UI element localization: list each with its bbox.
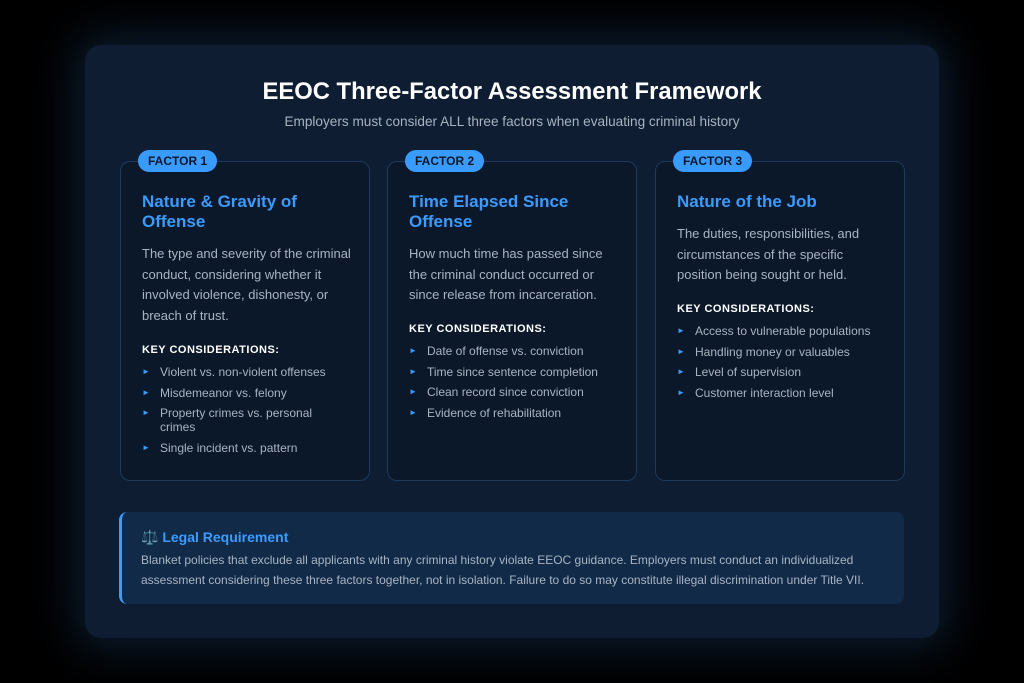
list: Time since sentence completion xyxy=(427,364,598,378)
list: Access to vulnerable populations xyxy=(695,324,870,338)
description: The type and severity of the criminal conduct, considering whether it involved violence, dishonesty, or breach of trust. xyxy=(142,246,351,322)
list: Customer interaction level xyxy=(695,386,834,400)
list: Misdemeanor vs. felony xyxy=(160,386,287,400)
badge: factor 3 xyxy=(673,150,752,172)
badge: factor 3: FACTOR 3 xyxy=(683,154,742,168)
description: The duties, responsibilities, and circumstances of the specific position being sought or held. xyxy=(677,226,859,282)
list: Violent vs. non-violent offenses xyxy=(160,365,326,379)
list: Level of supervision xyxy=(695,365,801,379)
callout: legal requirement xyxy=(119,512,904,604)
list: Handling money or valuables xyxy=(695,344,850,358)
list xyxy=(678,324,870,400)
list: Evidence of rehabilitation xyxy=(427,406,561,420)
legal heading with scale icon: ⚖️ Legal Requirement xyxy=(141,529,288,545)
heading: Nature of the Job xyxy=(677,192,817,211)
list xyxy=(410,344,598,420)
badge: factor 2: FACTOR 2 xyxy=(415,154,474,168)
badge: factor 2 xyxy=(405,150,484,172)
list: Single incident vs. pattern xyxy=(160,440,297,454)
key considerations label: KEY CONSIDERATIONS: xyxy=(409,323,546,335)
heading: Time Elapsed Since Offense xyxy=(409,192,568,231)
list xyxy=(144,365,326,454)
list: Clean record since conviction xyxy=(427,385,584,399)
panel: factor 2 xyxy=(387,161,637,481)
badge: factor 1: FACTOR 1 xyxy=(148,154,207,168)
heading: Nature & Gravity of Offense xyxy=(142,192,297,231)
title: EEOC Three-Factor Assessment Framework xyxy=(262,78,762,105)
panel: factor 3 xyxy=(655,161,905,481)
main panel xyxy=(85,45,939,638)
list: Property crimes vs. personal crimes xyxy=(160,406,312,434)
key considerations label: KEY CONSIDERATIONS: xyxy=(677,303,814,315)
list: Date of offense vs. conviction xyxy=(427,344,584,358)
legal text: Blanket policies that exclude all applicants with any criminal history violate EEOC guidance. Employers must conduct an individualized assessment considering these three factors together, not in isolation. Failure to do so may constitute illegal discrimination under Title VII. xyxy=(141,553,864,587)
panel: factor 1 xyxy=(120,161,370,481)
badge: factor 1 xyxy=(138,150,217,172)
subtitle: Employers must consider ALL three factors when evaluating criminal history xyxy=(284,114,740,129)
key considerations label: KEY CONSIDERATIONS: xyxy=(142,344,279,356)
description: How much time has passed since the criminal conduct occurred or since release from incarceration. xyxy=(409,246,603,302)
